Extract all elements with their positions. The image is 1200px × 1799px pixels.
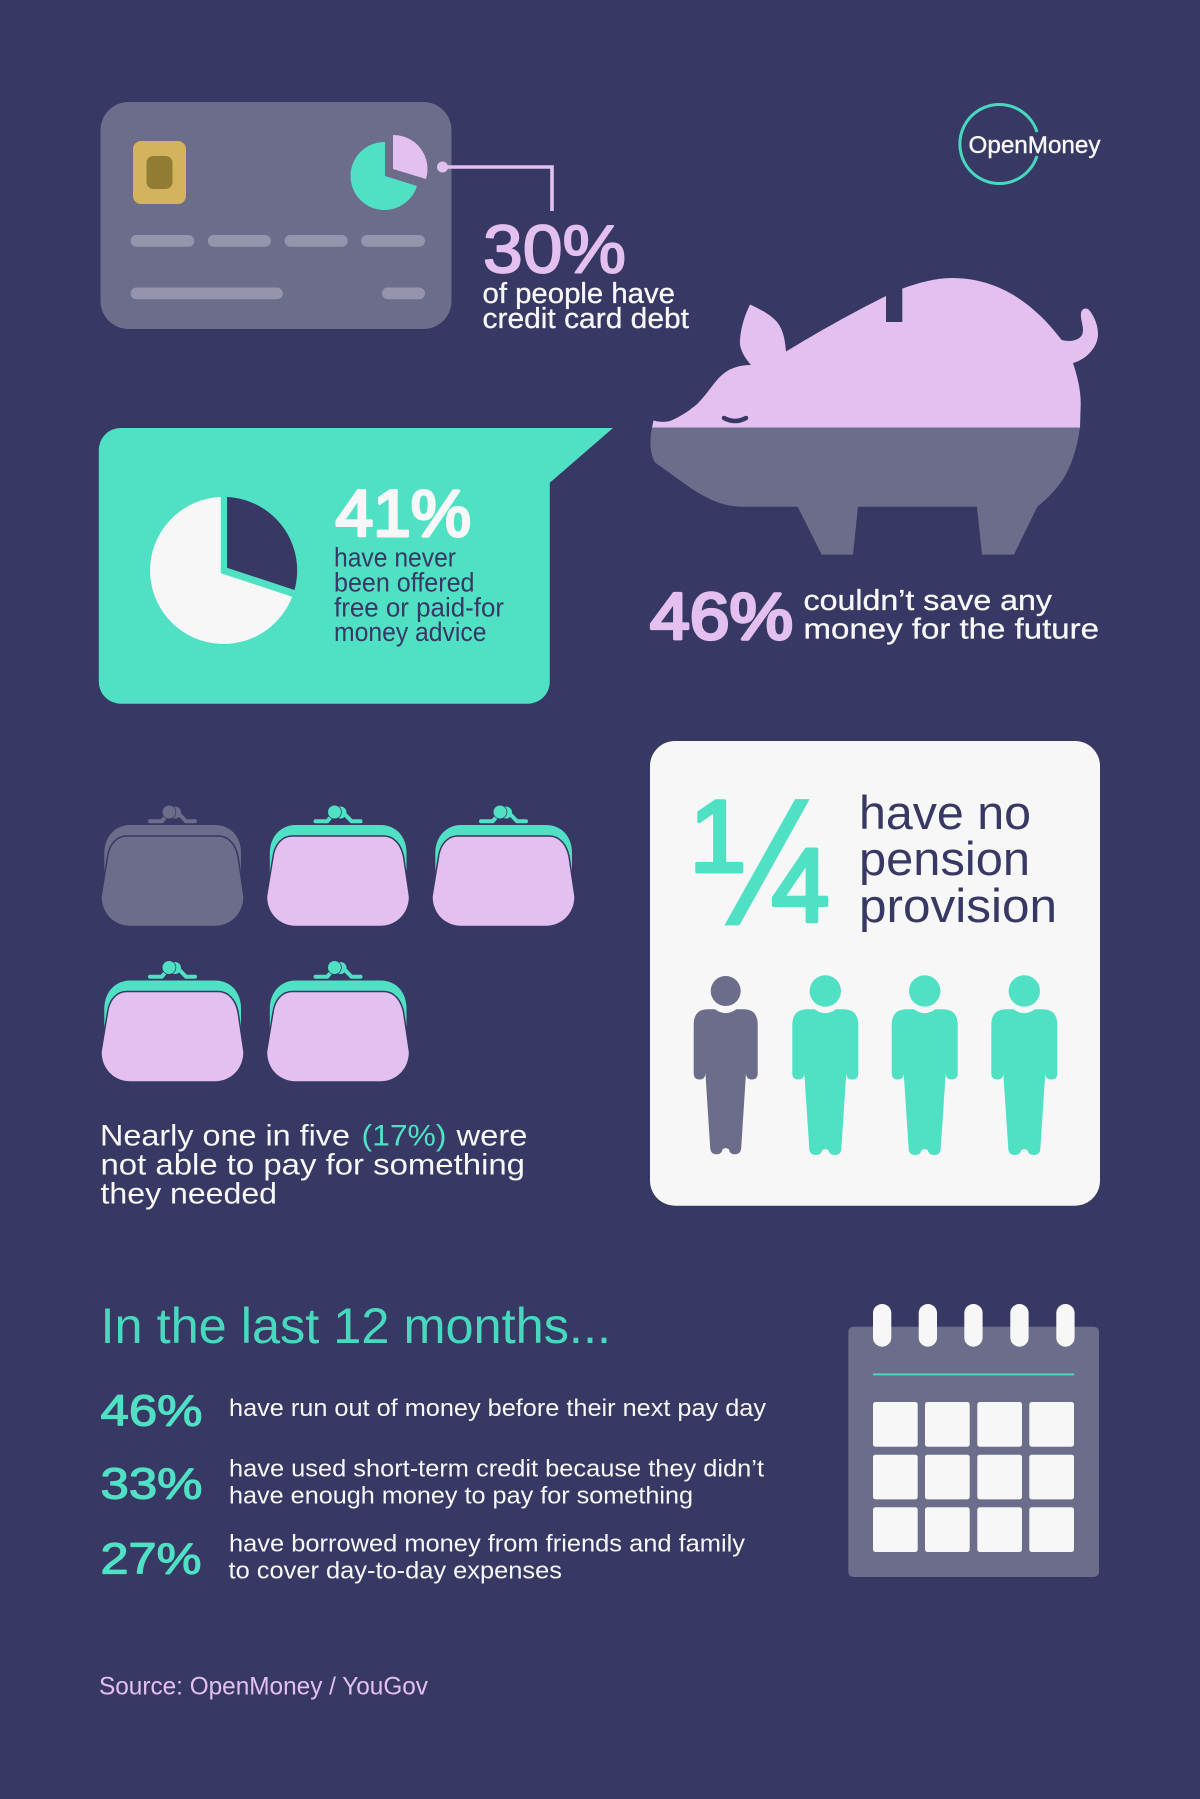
heading: in the last 12 months: In the last 12 months... xyxy=(100,1298,611,1354)
text: of people have credit card debt: of people have xyxy=(482,278,675,310)
pie chart: 30 percent xyxy=(351,135,428,210)
text: have no pension provision: pension xyxy=(859,832,1030,885)
stat: 30%: 30% xyxy=(483,212,626,288)
text: nearly one in five xyxy=(100,1120,528,1210)
text: never offered money advice: free or paid-for xyxy=(334,592,504,622)
stat list: last 12 months xyxy=(100,1386,767,1584)
text: of people have credit card debt: credit card debt xyxy=(482,303,689,335)
icon: purse 2 xyxy=(267,806,409,926)
stat row: 33 percent: have enough money to pay for something xyxy=(229,1482,693,1510)
icon: piggy bank xyxy=(650,278,1098,555)
stat row: 33 percent: 33% xyxy=(100,1460,202,1508)
text: nearly one in five: (17%) xyxy=(362,1120,446,1152)
text: nearly one in five: Nearly one in five xyxy=(100,1120,350,1152)
stat row: 46 percent: have run out of money before their next pay day xyxy=(229,1395,767,1422)
icon: purse 4 xyxy=(102,961,243,1081)
stat row: 27 percent: have borrowed money from friends and family xyxy=(229,1530,746,1558)
stat: 46% could not save xyxy=(650,579,1099,653)
panel: pension provision xyxy=(650,741,1100,1206)
text: have no pension provision: have no xyxy=(859,786,1031,839)
icon: card chip xyxy=(133,141,186,204)
stat row: 27 percent: 27% xyxy=(100,1534,202,1584)
pie chart: 41 percent xyxy=(150,497,297,644)
stat row: 27 percent: to cover day-to-day expenses xyxy=(228,1558,562,1584)
text: have no pension provision: provision xyxy=(859,879,1057,932)
credit card xyxy=(100,102,452,329)
fraction: one quarter: 4 xyxy=(772,828,829,944)
text: nearly one in five: not able to pay for something xyxy=(100,1148,525,1182)
panel: credit card debt xyxy=(100,102,689,335)
fraction: one quarter: 1 xyxy=(690,780,746,894)
text: of people have credit card debt xyxy=(482,278,689,335)
text: never offered money advice: money advice xyxy=(334,617,486,647)
stat: 41%: 41% xyxy=(336,476,471,550)
icon: purse 3 xyxy=(433,806,574,926)
stat row: 27 percent xyxy=(100,1530,746,1584)
text: nearly one in five: were xyxy=(455,1120,528,1152)
callout connector line xyxy=(437,162,552,211)
stat row: 46 percent: 46% xyxy=(100,1386,202,1436)
panel: money advice speech bubble xyxy=(99,428,613,704)
icon: empty purse xyxy=(102,806,243,926)
icon: person without pension xyxy=(694,976,758,1154)
text: never offered money advice xyxy=(334,542,504,647)
text: never offered money advice: been offered xyxy=(334,568,474,598)
icon: person 4 xyxy=(991,975,1057,1155)
logo: OpenMoney xyxy=(960,105,1100,184)
card number bars xyxy=(131,235,425,299)
stat row: 33 percent xyxy=(100,1456,764,1510)
stat: 46% could not save: money for the future xyxy=(804,614,1099,646)
source note: Source: OpenMoney / YouGov xyxy=(99,1672,428,1700)
text: never offered money advice: have never xyxy=(334,542,456,572)
icon: person 2 xyxy=(792,975,858,1155)
text: nearly one in five: they needed xyxy=(100,1178,277,1210)
stat row: 46 percent xyxy=(100,1386,767,1436)
stat row: 33 percent: have used short-term credit because they didn’t xyxy=(229,1456,764,1482)
icon: calendar xyxy=(848,1304,1099,1577)
stat: 46% could not save: 46% xyxy=(650,579,793,653)
purses pictogram xyxy=(102,806,574,1081)
stat: 46% could not save: couldn’t save any xyxy=(804,585,1053,617)
logo: OpenMoney: OpenMoney xyxy=(968,132,1100,159)
icon: purse 5 xyxy=(267,961,409,1081)
icon: person 3 xyxy=(892,975,958,1155)
text: have no pension provision xyxy=(859,786,1057,932)
fraction: one quarter: / xyxy=(716,769,818,959)
